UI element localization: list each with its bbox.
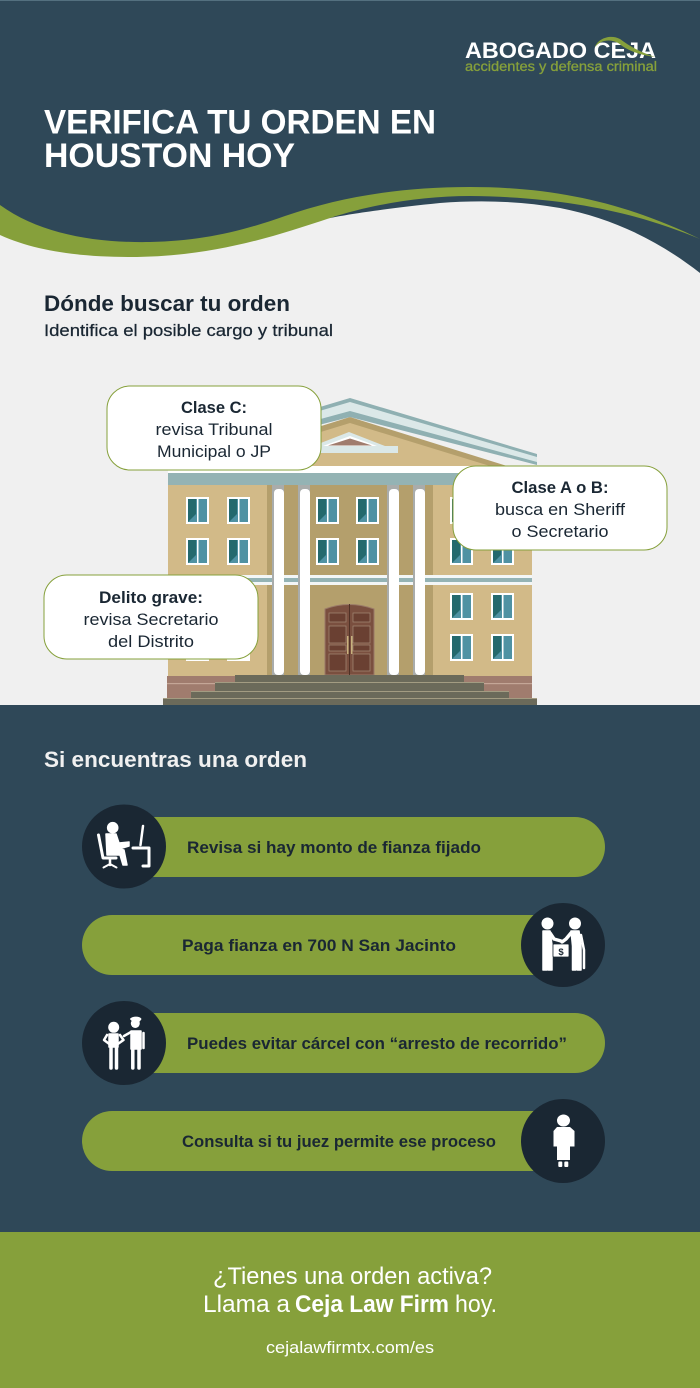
callout: Clase A o B: busca en Sheriff xyxy=(495,500,625,519)
callout: Delito grave xyxy=(44,575,258,659)
callout: Clase C xyxy=(107,386,321,470)
footer call to action: cejalawfirmtx.com/es xyxy=(266,1338,434,1357)
courthouse illustration xyxy=(163,398,537,705)
callout: Delito grave: revisa Secretario xyxy=(84,610,218,629)
footer call to action: ¿Tienes una orden activa? xyxy=(213,1263,492,1290)
columns xyxy=(272,485,425,675)
icon: judge xyxy=(554,1114,574,1167)
footer call to action: hoy. xyxy=(455,1291,497,1318)
title: HOUSTON HOY xyxy=(44,137,295,175)
callout: Clase A o B xyxy=(453,466,667,550)
title: VERIFICA TU ORDEN EN xyxy=(44,104,436,142)
title xyxy=(44,104,436,175)
callout: Delito grave: Delito grave: xyxy=(99,589,203,607)
callout: Clase C: revisa Tribunal xyxy=(156,420,272,439)
step 2: Paga fianza en 700 N San Jacinto xyxy=(182,937,456,955)
heading: si encuentras: Si encuentras una orden xyxy=(44,747,307,772)
walls xyxy=(168,485,532,676)
heading: donde buscar: Dónde buscar tu orden xyxy=(44,291,290,316)
icon: officer and detainee xyxy=(104,1017,144,1068)
pediment xyxy=(300,432,398,453)
step 4: Consulta si tu juez permite ese proceso xyxy=(182,1133,496,1151)
callout: Clase A o B: o Secretario xyxy=(512,522,608,541)
callout: Clase C: Clase C: xyxy=(181,399,247,417)
door xyxy=(325,604,374,675)
callout: Delito grave: del Distrito xyxy=(108,632,194,651)
footer call to action: Ceja Law Firm xyxy=(295,1291,449,1318)
footer call to action: Llama a xyxy=(203,1291,291,1318)
step 3: Puedes evitar cárcel con “arresto de recorrido” xyxy=(187,1035,567,1053)
step 2 xyxy=(82,903,605,987)
callout: Clase C: Municipal o JP xyxy=(157,442,271,461)
subheading: Identifica el posible cargo y tribunal xyxy=(44,321,333,340)
steps xyxy=(235,675,464,682)
cornice xyxy=(168,466,532,473)
gable xyxy=(193,417,507,466)
icon: person at desk xyxy=(98,822,149,868)
logo: ABOGADO CEJA xyxy=(465,38,656,63)
icon: handing over bail money: $ xyxy=(558,947,564,958)
brick base xyxy=(167,676,532,699)
green wave xyxy=(0,187,700,257)
panel: si encuentras una orden xyxy=(0,705,700,1232)
footer call to action xyxy=(0,1232,700,1388)
icon: handing over bail money xyxy=(542,918,584,970)
step 4 xyxy=(82,1099,605,1183)
roof xyxy=(163,398,537,465)
windows xyxy=(186,497,514,661)
logo xyxy=(465,37,657,74)
step 3 xyxy=(82,1001,605,1085)
logo: accidentes y defensa criminal xyxy=(465,59,657,74)
step 1: Revisa si hay monto de fianza fijado xyxy=(187,839,481,857)
header banner xyxy=(0,0,700,273)
callout: Clase A o B: Clase A o B: xyxy=(512,479,608,497)
mid band xyxy=(168,575,532,585)
step 1 xyxy=(82,804,605,888)
